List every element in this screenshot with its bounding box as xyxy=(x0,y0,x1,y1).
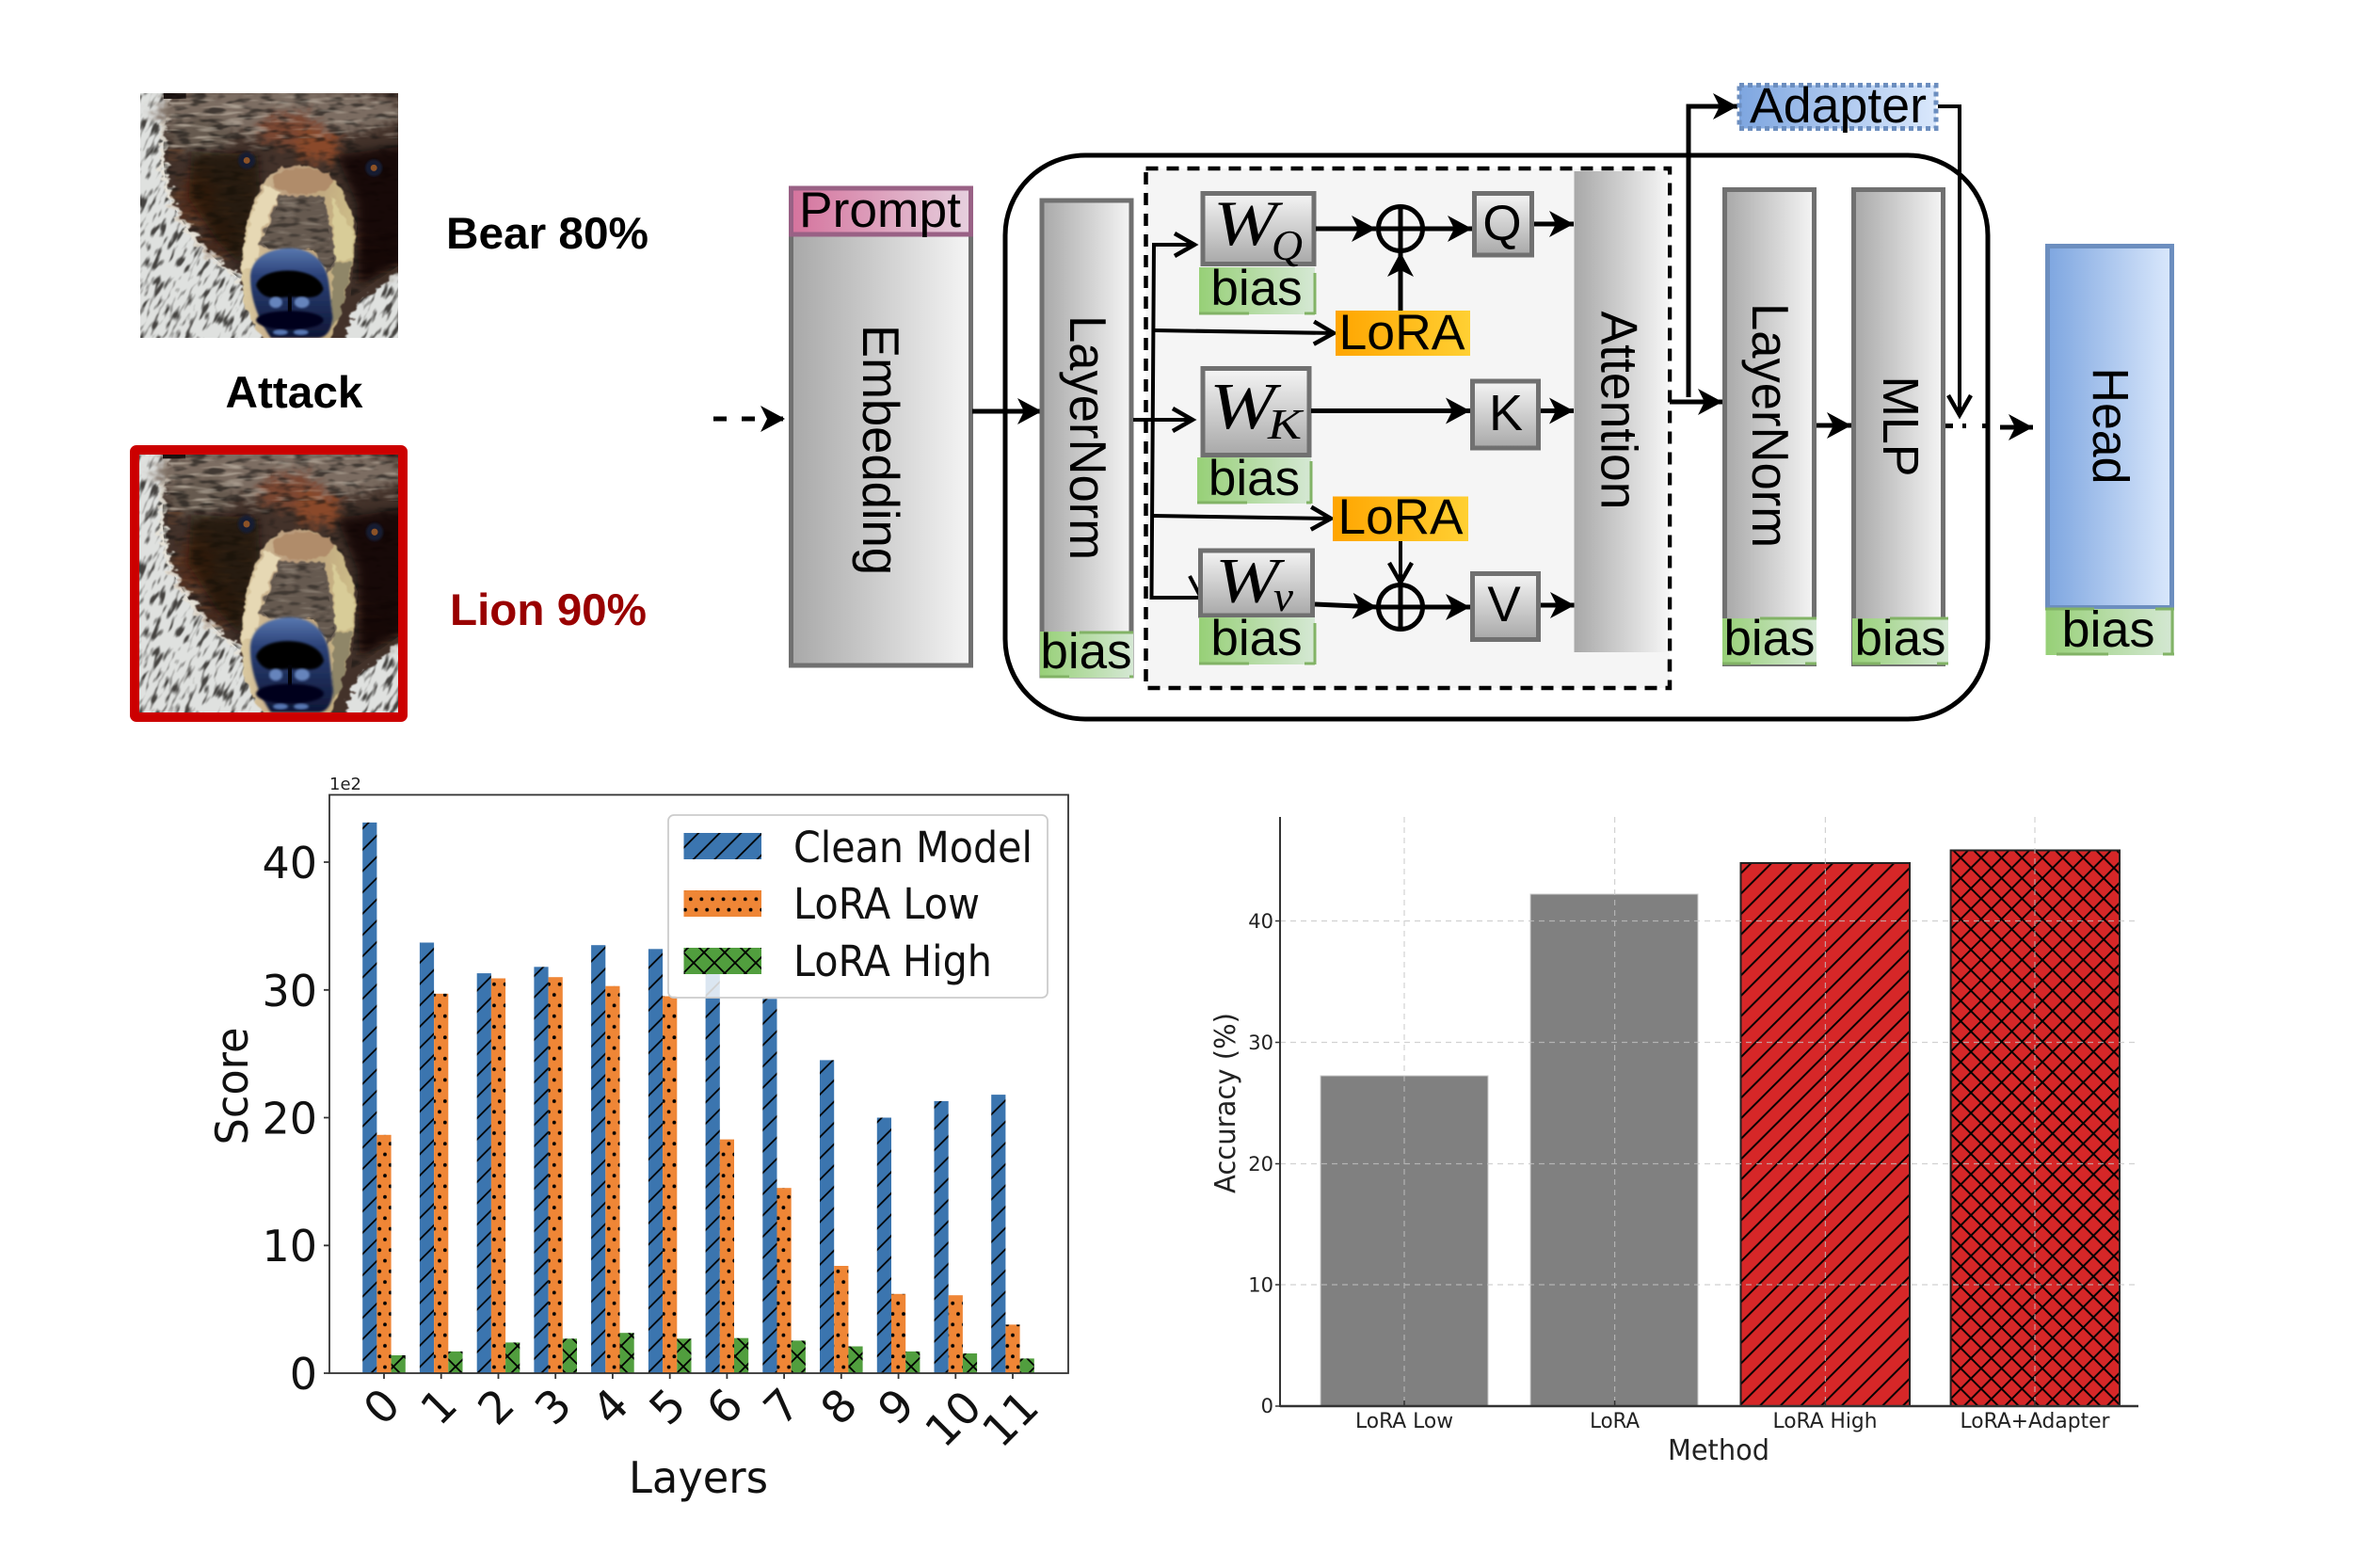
x tick labels: 10 xyxy=(916,1381,992,1458)
block: LoRA upper: LoRA xyxy=(1338,305,1465,360)
arrow: branch to Adapter xyxy=(1689,106,1737,397)
block: K: K xyxy=(1489,385,1523,441)
y tick labels: 40 xyxy=(1248,910,1273,933)
image: attacked bear with red frame xyxy=(0,74,648,1013)
icon: lower plus node xyxy=(1378,584,1423,630)
panel: bear images and predictions xyxy=(0,0,648,1013)
figure canvas xyxy=(130,83,2174,1502)
bar: LoRA Low xyxy=(1321,1076,1488,1406)
block: V: V xyxy=(1487,577,1521,632)
arrows: value path xyxy=(1315,541,1575,607)
x tick labels: LoRA+Adapter xyxy=(1960,1410,2110,1433)
panel: architecture diagram xyxy=(713,78,2174,719)
block: LayerNorm 2 xyxy=(1724,190,1815,664)
arrow: Attention to LayerNorm 2 xyxy=(1670,399,1722,405)
x tick labels: 6 xyxy=(696,1379,753,1435)
legend: LoRA High xyxy=(793,936,992,986)
bar: LoRA High xyxy=(1741,863,1910,1406)
block: W_v: W xyxy=(1215,544,1285,616)
y tick labels: 20 xyxy=(1248,1153,1273,1176)
label: Lion 90%: Lion 90% xyxy=(450,584,647,634)
axis lines and ticks xyxy=(1275,817,2138,1407)
block: W_K xyxy=(1203,369,1309,456)
block: Head xyxy=(2048,247,2172,608)
arrow: Embedding to LayerNorm xyxy=(972,408,1042,414)
bias: W_v: bias xyxy=(1210,611,1303,666)
block: W_Q xyxy=(1203,187,1314,269)
axes frame and ticks xyxy=(324,794,1068,1379)
arrows: query path xyxy=(1316,224,1574,311)
y tick labels: 20 xyxy=(262,1094,317,1144)
legend: LoRA Low xyxy=(793,879,980,929)
label: Attack: Attack xyxy=(226,367,363,417)
bus connector and branch arrows xyxy=(1133,245,1335,598)
x tick labels: 9 xyxy=(869,1379,925,1435)
x tick labels: 11 xyxy=(972,1381,1049,1458)
arrows: key path xyxy=(1311,408,1574,413)
x tick labels: LoRA Low xyxy=(1355,1410,1453,1433)
block: W_v xyxy=(1201,544,1312,620)
y tick labels: 30 xyxy=(262,966,317,1016)
x tick labels: 0 xyxy=(354,1379,410,1435)
block: Prompt: Prompt xyxy=(799,183,961,238)
block: Embedding xyxy=(791,233,971,665)
block: Attention: Attention xyxy=(1591,311,1649,510)
attention module dashed panel xyxy=(1146,168,1670,688)
icon: upper plus node xyxy=(1378,206,1423,251)
x tick labels xyxy=(1355,1410,2110,1433)
y tick labels: 10 xyxy=(262,1221,317,1272)
image: clean bear xyxy=(0,0,645,621)
block: MLP: MLP xyxy=(1872,376,1929,476)
block: W_v: v xyxy=(1273,572,1294,620)
y tick labels: 30 xyxy=(1248,1032,1273,1054)
y tick labels: 10 xyxy=(1248,1274,1273,1297)
block: Embedding: Embedding xyxy=(852,325,910,575)
y axis title: Score xyxy=(207,1028,259,1144)
x tick labels: 7 xyxy=(754,1379,810,1435)
bias: W_Q: bias xyxy=(1210,261,1303,316)
input dashed arrow xyxy=(713,416,785,422)
x tick labels: 2 xyxy=(469,1379,525,1435)
x tick labels: 1 xyxy=(411,1379,468,1435)
bias: LayerNorm 1: bias xyxy=(1040,624,1132,680)
block: LoRA lower: LoRA xyxy=(1338,489,1464,545)
bar: LoRA xyxy=(1530,894,1698,1406)
block: Attention xyxy=(1574,171,1668,652)
bias: W_K: bias xyxy=(1209,451,1300,506)
bars: Clean Model xyxy=(362,823,1005,1373)
block: Q xyxy=(1474,194,1532,255)
block: K xyxy=(1472,381,1538,448)
y tick labels: 0 xyxy=(1261,1395,1273,1417)
grid lines xyxy=(1280,817,2138,1406)
axis offset label: 1e2 xyxy=(329,775,361,794)
block: W_K: K xyxy=(1267,400,1305,448)
block: LayerNorm 1 xyxy=(1042,200,1131,676)
bias: LayerNorm 2: bias xyxy=(1724,611,1815,666)
y axis title: Accuracy (%) xyxy=(1209,1013,1242,1193)
arrow: dotted MLP to Head xyxy=(1945,425,2033,427)
x tick labels: 8 xyxy=(811,1379,868,1435)
block: V xyxy=(1472,574,1538,640)
x axis title: Method xyxy=(1668,1434,1769,1467)
x tick labels: 5 xyxy=(640,1379,696,1435)
y tick labels: 0 xyxy=(290,1349,317,1400)
bias: MLP: bias xyxy=(1854,611,1946,666)
block: LayerNorm 1: LayerNorm xyxy=(1059,315,1117,560)
block: W_K: W xyxy=(1209,371,1282,443)
x tick labels: 3 xyxy=(525,1379,582,1435)
y tick labels: 40 xyxy=(262,838,317,888)
arrow: Adapter to output xyxy=(1938,106,1960,416)
x axis title: Layers xyxy=(629,1452,768,1503)
x tick labels: LoRA High xyxy=(1773,1410,1877,1433)
block: Head: Head xyxy=(2082,367,2138,484)
bias: Head: bias xyxy=(2061,601,2155,658)
legend: Clean Model xyxy=(793,823,1032,872)
label: Bear 80%: Bear 80% xyxy=(446,208,648,258)
block: MLP xyxy=(1854,190,1943,664)
x tick labels xyxy=(354,1379,1049,1458)
block: W_Q: Q xyxy=(1272,221,1303,269)
block: LayerNorm 2: LayerNorm xyxy=(1741,303,1800,548)
legend xyxy=(668,815,1048,998)
block: Q: Q xyxy=(1482,196,1522,251)
x tick labels: LoRA xyxy=(1590,1410,1640,1433)
chart: Accuracy by method xyxy=(1209,817,2138,1467)
bars: LoRA High xyxy=(392,1333,1034,1373)
y tick labels xyxy=(262,838,317,1400)
transformer block outline xyxy=(1005,155,1988,719)
bars: LoRA Low xyxy=(376,977,1020,1373)
arrow: LayerNorm 2 to MLP xyxy=(1817,424,1851,427)
block: W_Q: W xyxy=(1213,187,1283,259)
bar: LoRA+Adapter xyxy=(1951,851,2120,1406)
chart: Score by layer grouped bars xyxy=(207,775,1068,1503)
y tick labels xyxy=(1248,910,1273,1417)
x tick labels: 4 xyxy=(583,1379,639,1435)
block: Adapter: Adapter xyxy=(1750,78,1927,134)
